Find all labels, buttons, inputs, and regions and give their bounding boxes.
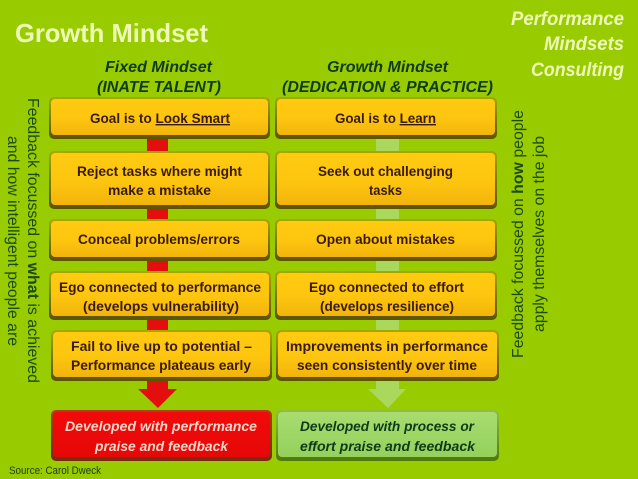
box: performance praise: Developed with performance bbox=[65, 418, 257, 434]
box: ego performance bbox=[49, 271, 271, 320]
heading: growth mindset: Growth Mindset bbox=[327, 59, 449, 76]
box: ego effort: (develops resilience) bbox=[320, 298, 454, 314]
box: conceal problems: Conceal problems/errors bbox=[78, 231, 240, 247]
box: fail to live up: Fail to live up to potential – bbox=[71, 338, 252, 354]
box: improvements: seen consistently over time bbox=[297, 357, 477, 373]
box: seek challenging bbox=[275, 151, 497, 209]
right connectors and arrow bbox=[368, 138, 406, 408]
box: open about mistakes bbox=[275, 219, 497, 261]
box: reject tasks: make a mistake bbox=[108, 182, 211, 198]
box: performance praise: praise and feedback bbox=[94, 438, 229, 454]
side text: left feedback: and how intelligent people are bbox=[4, 136, 21, 346]
box: improvements bbox=[276, 330, 499, 381]
box: fail to live up: Performance plateaus early bbox=[71, 357, 251, 373]
heading: fixed mindset bbox=[97, 59, 221, 96]
side text: left feedback: Feedback focussed on what is achieved bbox=[24, 98, 41, 383]
title: Growth Mindset bbox=[15, 18, 208, 48]
box: reject tasks bbox=[49, 151, 270, 209]
box: seek challenging: tasks bbox=[369, 182, 402, 198]
box: ego effort: Ego connected to effort bbox=[309, 279, 464, 295]
box: look smart: Goal is to Look Smart bbox=[90, 110, 230, 126]
panel: fixed mindset column bbox=[49, 97, 272, 461]
box: ego performance: (develops vulnerability) bbox=[83, 298, 239, 314]
box: learn: Goal is to Learn bbox=[335, 110, 436, 126]
heading: growth mindset: (DEDICATION & PRACTICE) bbox=[282, 79, 493, 96]
heading: fixed mindset: (INATE TALENT) bbox=[97, 79, 221, 96]
box: process praise bbox=[276, 410, 499, 461]
logo text: Performance Mindsets Consulting bbox=[511, 9, 624, 81]
heading: growth mindset bbox=[282, 59, 493, 96]
side text: right feedback bbox=[510, 110, 548, 358]
box: seek challenging: Seek out challenging bbox=[318, 163, 453, 179]
box: performance praise bbox=[51, 410, 272, 461]
box: process praise: Developed with process or bbox=[300, 418, 476, 434]
box: improvements: Improvements in performance bbox=[286, 338, 488, 354]
logo text: Performance Mindsets Consulting: Mindsets bbox=[544, 34, 624, 55]
box: ego performance: Ego connected to performance bbox=[59, 279, 261, 295]
logo text: Performance Mindsets Consulting: Performance bbox=[511, 9, 624, 30]
box: conceal problems bbox=[49, 219, 270, 261]
logo text: Performance Mindsets Consulting: Consulting bbox=[531, 60, 624, 81]
box: reject tasks: Reject tasks where might bbox=[77, 163, 242, 179]
side text: right feedback: Feedback focussed on how people bbox=[510, 110, 527, 358]
side text: left feedback bbox=[4, 98, 41, 383]
box: process praise: effort praise and feedback bbox=[300, 438, 476, 454]
box: fail to live up bbox=[51, 330, 272, 381]
panel: growth mindset column bbox=[275, 97, 499, 461]
box: open about mistakes: Open about mistakes bbox=[316, 231, 455, 247]
heading: fixed mindset: Fixed Mindset bbox=[105, 59, 213, 76]
box: learn bbox=[275, 97, 497, 139]
box: look smart bbox=[49, 97, 270, 139]
side text: right feedback: apply themselves on the job bbox=[531, 136, 548, 332]
box: ego effort bbox=[275, 271, 497, 320]
source note: Source: Carol Dweck bbox=[9, 465, 101, 477]
left connectors and arrow bbox=[138, 138, 177, 408]
